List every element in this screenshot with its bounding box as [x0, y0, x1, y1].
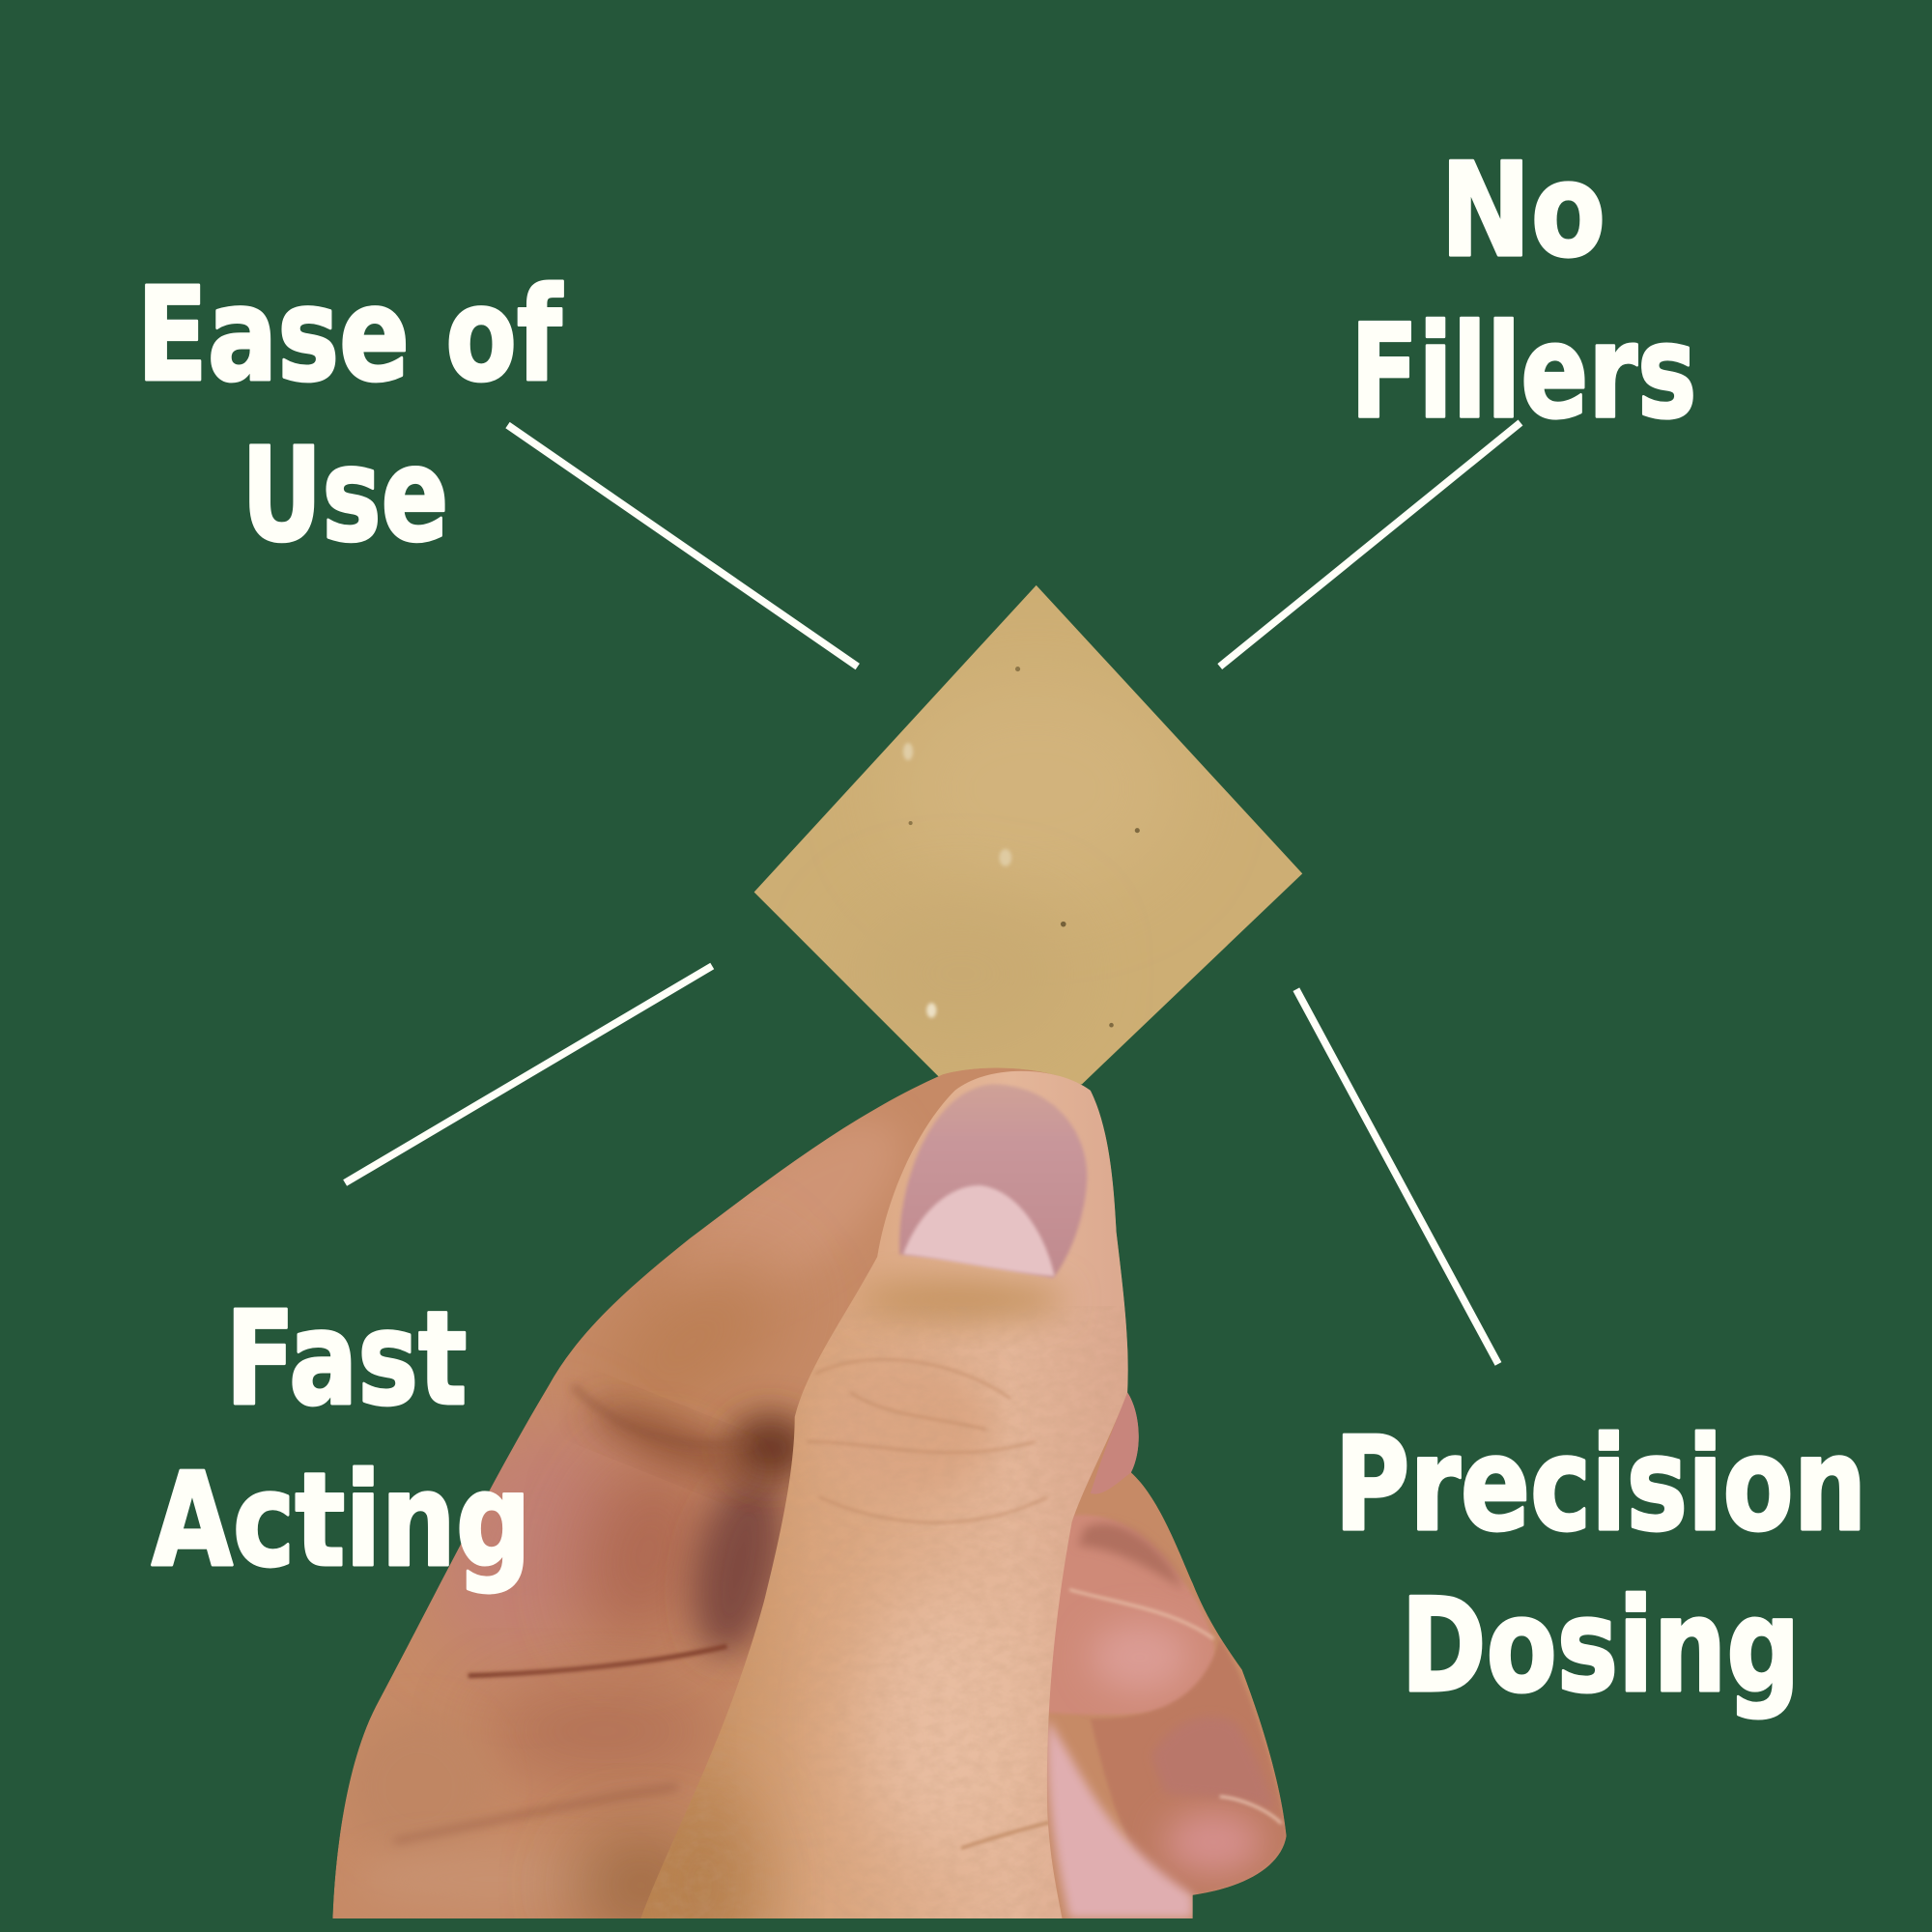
label: Fast Acting	[152, 1284, 531, 1596]
label: Precision Dosing	[1334, 1409, 1866, 1721]
thumbnail	[899, 1084, 1087, 1278]
hand silhouette: palm and index finger	[332, 1067, 1287, 1932]
label: Fast Acting: Fast	[225, 1284, 467, 1435]
label: Ease of Use: Use	[242, 420, 448, 571]
nail lunula	[903, 1185, 1055, 1276]
hand holding the strip	[332, 1060, 1287, 1932]
connector line: Precision Dosing	[1296, 989, 1498, 1364]
dissolvable strip diamond	[754, 585, 1302, 1084]
label: No Fillers: No	[1440, 135, 1605, 286]
connector line: Fast Acting	[345, 966, 712, 1182]
label: No Fillers: Fillers	[1350, 297, 1696, 447]
label: Precision Dosing: Dosing	[1401, 1571, 1801, 1721]
fingers behind the thumb	[1046, 1392, 1287, 1918]
label: Ease of Use	[137, 260, 563, 571]
thumb	[640, 1060, 1133, 1932]
connector line: Ease of Use	[508, 425, 858, 667]
label: No Fillers	[1350, 135, 1696, 447]
label: Ease of Use: Ease of	[137, 260, 563, 411]
connector line: No Fillers	[1220, 423, 1520, 667]
label: Fast Acting: Acting	[152, 1445, 531, 1596]
